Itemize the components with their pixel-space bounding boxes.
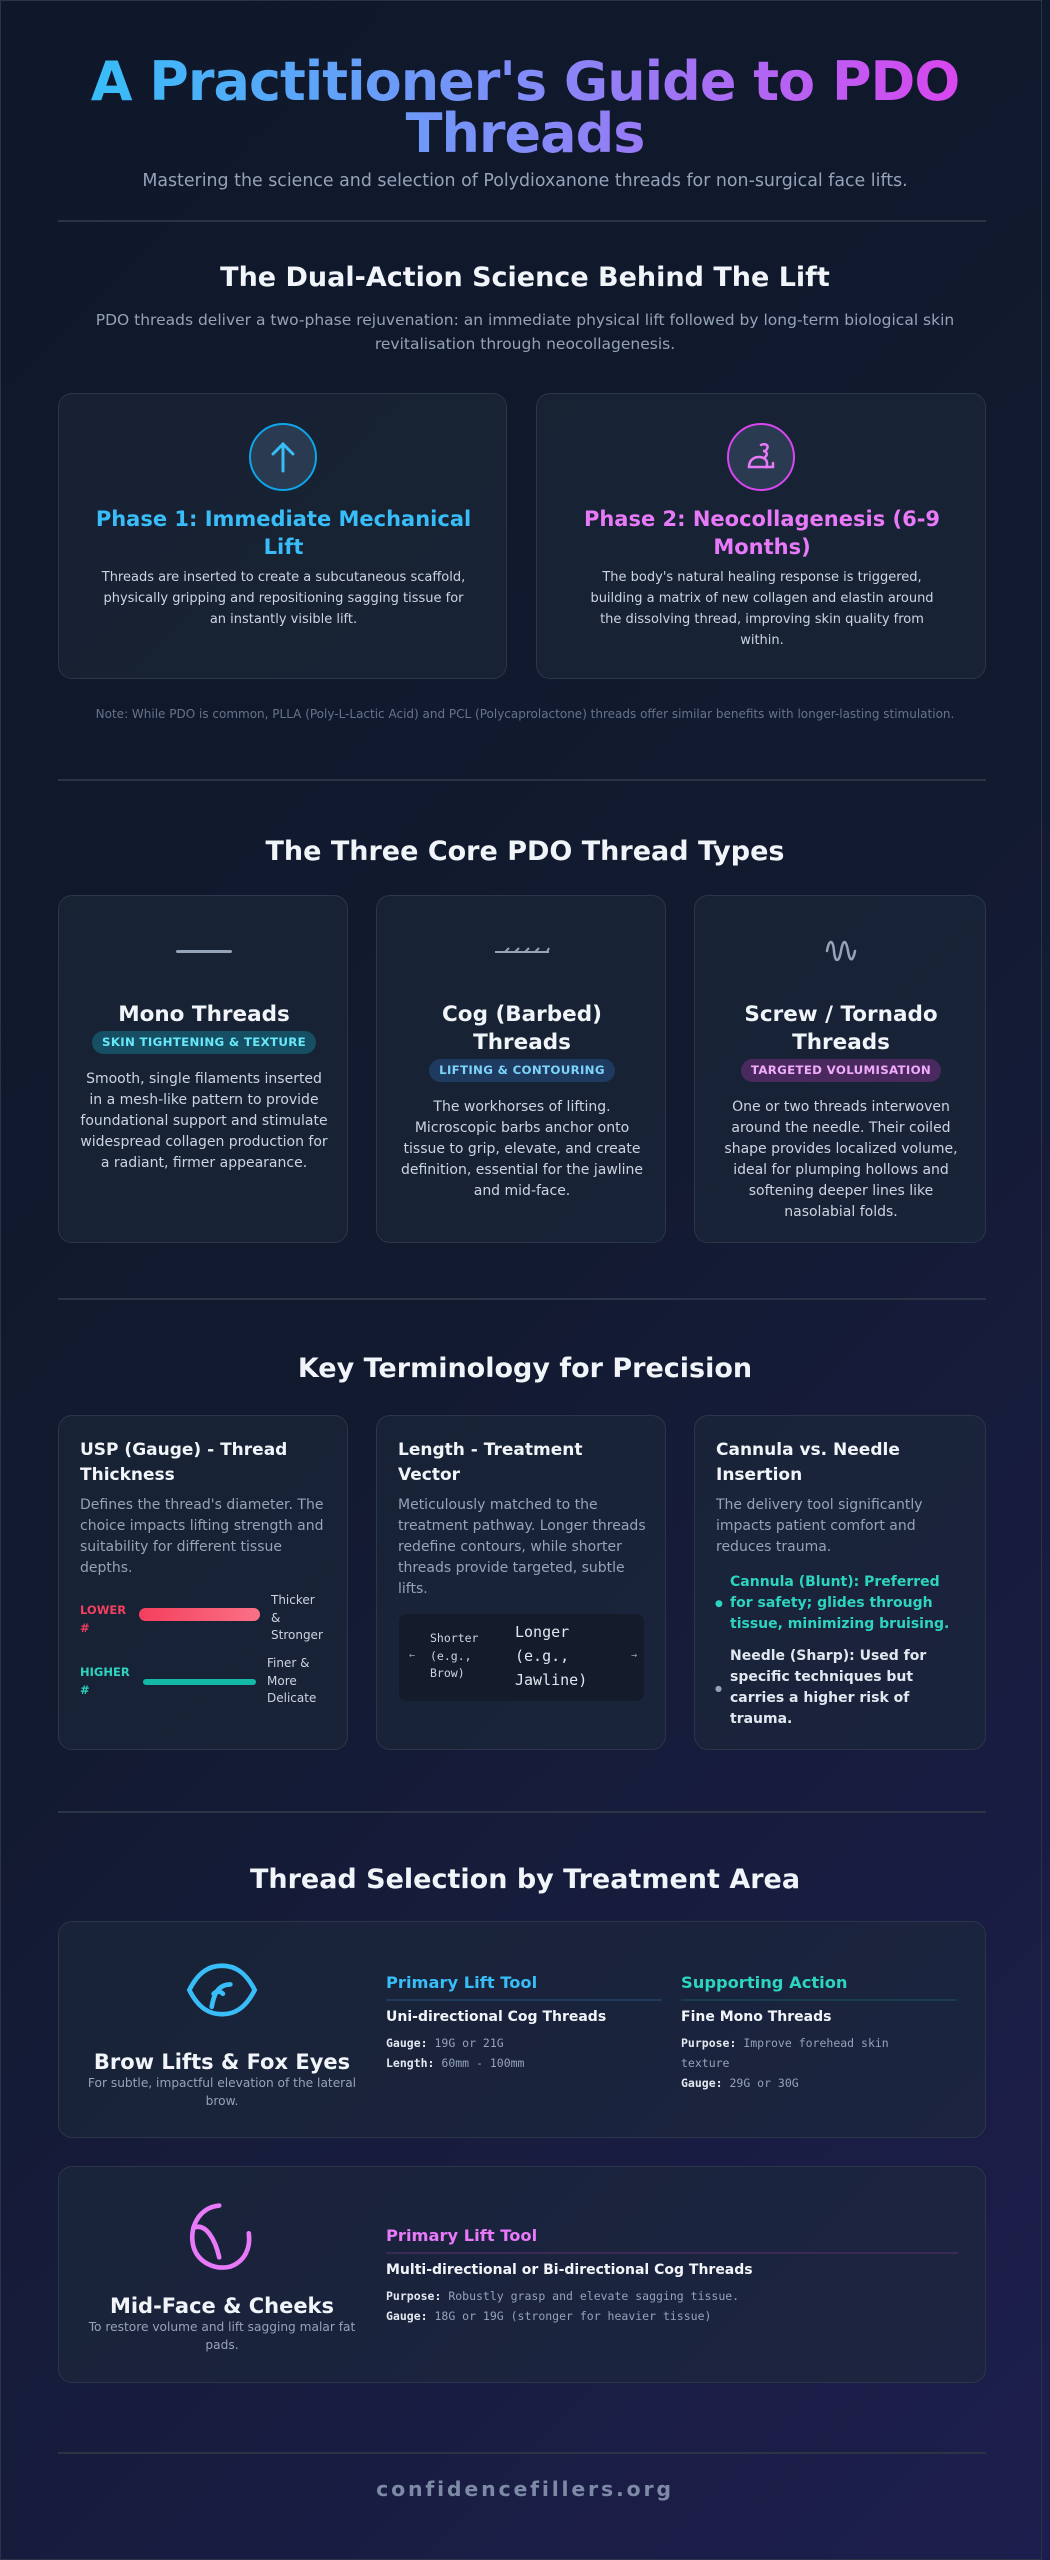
icon: cheek <box>190 2203 252 2270</box>
bullet needle: ● <box>715 1684 722 1693</box>
icon: up arrow <box>249 423 317 491</box>
cannula text: The delivery tool significantly <box>716 1497 923 1513</box>
screw text <box>724 1099 958 1220</box>
midface subtitle: pads. <box>205 2338 239 2352</box>
intro paragraph: PDO threads deliver a two-phase rejuvenation: an immediate physical lift followed by long-term biological skin <box>96 311 954 329</box>
cog text: tissue to grip, elevate, and create <box>404 1141 640 1157</box>
gauge text: suitability for different tissue <box>80 1539 282 1555</box>
panel: mid-face <box>58 2166 986 2383</box>
length scale box <box>399 1614 644 1701</box>
column: supporting action: texture <box>681 2056 729 2070</box>
panel: phase 2 <box>536 393 986 679</box>
intro paragraph <box>96 311 954 353</box>
length title: Vector <box>398 1464 460 1484</box>
screw text: One or two threads interwoven <box>732 1099 950 1115</box>
column: primary lift tool: Gauge: 19G or 21G <box>386 2036 504 2050</box>
phase 2 text: building a matrix of new collagen and elastin around <box>590 591 934 606</box>
lower bar row: # <box>80 1621 90 1635</box>
subtitle: Mastering the science and selection of Polydioxanone threads for non-surgical face lifts. <box>142 171 908 191</box>
column: primary lift tool: Gauge: 18G or 19G (stronger for heavier tissue) <box>386 2309 711 2323</box>
lower bar row <box>80 1593 323 1642</box>
cog text: and mid-face. <box>474 1183 570 1199</box>
higher bar row <box>80 1656 316 1705</box>
higher bar row: Finer & <box>267 1656 309 1670</box>
bullet needle <box>715 1648 926 1727</box>
length text: threads provide targeted, subtle <box>398 1560 625 1576</box>
lower bar row: LOWER <box>80 1603 126 1617</box>
title <box>40 56 1010 160</box>
gauge text <box>80 1497 324 1576</box>
screw title <box>744 1002 938 1054</box>
mono title: Mono Threads <box>118 1002 290 1027</box>
bullet cannula <box>715 1574 949 1632</box>
footer: confidencefillers.org <box>376 2477 674 2501</box>
brow subtitle: For subtle, impactful elevation of the lateral <box>88 2076 356 2090</box>
heading: dual action: The Dual-Action Science Behind The Lift <box>220 262 830 293</box>
lower bar row: & <box>271 1610 280 1624</box>
column: supporting action <box>681 1973 957 2090</box>
length scale box: (e.g., <box>430 1648 472 1662</box>
gauge title: USP (Gauge) - Thread <box>80 1440 287 1460</box>
cannula text <box>716 1497 923 1555</box>
gauge title: Thickness <box>80 1464 175 1484</box>
cog title: Cog (Barbed) <box>442 1002 602 1027</box>
length scale box: Jawline) <box>515 1671 587 1689</box>
length scale box: (e.g., <box>515 1647 569 1665</box>
phase 1 title: Phase 1: Immediate Mechanical <box>96 507 471 531</box>
cannula text: impacts patient comfort and <box>716 1518 916 1534</box>
phase 1 text <box>102 570 465 627</box>
column: primary lift tool <box>386 2226 958 2323</box>
bullet needle: specific techniques but <box>730 1669 913 1685</box>
lower bar row: Stronger <box>271 1628 323 1642</box>
badge: TARGETED VOLUMISATION <box>751 1063 931 1077</box>
badge: LIFTING & CONTOURING <box>439 1063 605 1077</box>
phase 2 title <box>584 507 940 559</box>
phase 1 text: an instantly visible lift. <box>210 612 357 627</box>
panel: brow lifts <box>58 1921 986 2138</box>
lower bar row: Thicker <box>271 1593 315 1607</box>
bullet needle: trauma. <box>730 1711 792 1727</box>
note: Note: While PDO is common, PLLA (Poly-L-Lactic Acid) and PCL (Polycaprolactone) threads offer similar benefits with longer-lasting stimulation. <box>96 707 954 721</box>
length text: Meticulously matched to the <box>398 1497 598 1513</box>
mono text: widespread collagen production for <box>80 1134 328 1150</box>
higher bar row: More <box>267 1674 297 1688</box>
cannula title: Insertion <box>716 1464 802 1484</box>
screw text: ideal for plumping hollows and <box>733 1162 949 1178</box>
length scale box: Brow) <box>430 1666 465 1680</box>
mono text: a radiant, firmer appearance. <box>101 1155 307 1171</box>
midface subtitle: To restore volume and lift sagging malar fat <box>89 2320 355 2334</box>
brow subtitle <box>88 2076 356 2108</box>
bullet needle: carries a higher risk of <box>730 1690 909 1706</box>
column: primary lift tool: Primary Lift Tool <box>386 2226 537 2245</box>
screw text: softening deeper lines like <box>749 1183 933 1199</box>
gauge text: depths. <box>80 1560 132 1576</box>
panel: screw threads <box>694 895 986 1243</box>
cog title: Threads <box>473 1030 571 1054</box>
heading: thread types: The Three Core PDO Thread Types <box>265 836 784 867</box>
length text: redefine contours, while shorter <box>398 1539 622 1555</box>
title: Threads <box>406 102 644 165</box>
mono text: in a mesh-like pattern to provide <box>89 1092 319 1108</box>
phase 2 text <box>590 570 934 648</box>
screw title: Screw / Tornado <box>744 1002 938 1027</box>
badge: SKIN TIGHTENING & TEXTURE <box>102 1035 306 1049</box>
panel: mono threads <box>58 895 348 1243</box>
panel: cannula vs needle <box>694 1415 986 1750</box>
brow subtitle: brow. <box>206 2094 238 2108</box>
cog title <box>442 1002 602 1054</box>
length text: treatment pathway. Longer threads <box>398 1518 646 1534</box>
phase 1 text: physically gripping and repositioning sagging tissue for <box>103 591 464 606</box>
column: primary lift tool: Purpose: Robustly grasp and elevate sagging tissue. <box>386 2289 739 2303</box>
title: A Practitioner's Guide to PDO <box>91 50 959 113</box>
length text: lifts. <box>398 1581 428 1597</box>
mono text <box>80 1071 328 1171</box>
bullet cannula: tissue, minimizing bruising. <box>730 1616 949 1632</box>
panel: gauge <box>58 1415 348 1750</box>
cog text: The workhorses of lifting. <box>433 1099 611 1115</box>
midface subtitle <box>88 2320 355 2352</box>
gauge text: Defines the thread's diameter. The <box>80 1497 323 1513</box>
column: primary lift tool: Multi-directional or Bi-directional Cog Threads <box>386 2262 753 2278</box>
bullet needle: Needle (Sharp): Used for <box>730 1648 926 1664</box>
higher bar row: # <box>80 1683 90 1697</box>
length scale box: → <box>631 1650 637 1661</box>
cog text: definition, essential for the jawline <box>401 1162 643 1178</box>
phase 2 text: within. <box>740 633 784 648</box>
phase 2 title: Months) <box>713 535 811 559</box>
bullet cannula: ● <box>715 1599 723 1609</box>
length scale box: ← <box>409 1650 415 1661</box>
column: primary lift tool: Uni-directional Cog Threads <box>386 2009 606 2025</box>
icon: barbed line <box>495 947 550 953</box>
cannula title: Cannula vs. Needle <box>716 1440 900 1460</box>
mono text: Smooth, single filaments inserted <box>86 1071 322 1087</box>
column: primary lift tool: Primary Lift Tool <box>386 1973 537 1992</box>
length title: Length - Treatment <box>398 1440 582 1460</box>
mono text: foundational support and stimulate <box>80 1113 328 1129</box>
cog text: Microscopic barbs anchor onto <box>415 1120 629 1136</box>
column: primary lift tool <box>386 1973 662 2070</box>
length text <box>398 1497 646 1597</box>
panel: phase 1 <box>58 393 507 679</box>
heading: terminology: Key Terminology for Precision <box>298 1353 752 1384</box>
bullet cannula: Cannula (Blunt): Preferred <box>730 1574 940 1590</box>
gauge text: choice impacts lifting strength and <box>80 1518 324 1534</box>
midface title: Mid-Face & Cheeks <box>110 2294 334 2318</box>
bullet cannula: for safety; glides through <box>730 1595 933 1611</box>
column: supporting action: Supporting Action <box>681 1973 848 1992</box>
length scale box: Longer <box>515 1623 569 1641</box>
higher bar row: HIGHER <box>80 1665 130 1679</box>
phase 1 text: Threads are inserted to create a subcutaneous scaffold, <box>102 570 465 585</box>
length title <box>398 1440 582 1484</box>
cannula title <box>716 1440 900 1484</box>
heading: treatment area: Thread Selection by Treatment Area <box>250 1864 800 1895</box>
icon: collagen <box>727 423 795 491</box>
column: primary lift tool: Length: 60mm - 100mm <box>386 2056 524 2070</box>
panel: cog threads <box>376 895 666 1243</box>
higher bar row: Delicate <box>267 1691 316 1705</box>
brow title: Brow Lifts & Fox Eyes <box>94 2050 350 2074</box>
column: supporting action: Purpose: Improve forehead skin <box>681 2036 889 2050</box>
phase 2 title: Phase 2: Neocollagenesis (6-9 <box>584 507 940 531</box>
phase 2 text: the dissolving thread, improving skin quality from <box>600 612 924 627</box>
column: supporting action: Fine Mono Threads <box>681 2009 831 2025</box>
screw text: around the needle. Their coiled <box>731 1120 951 1136</box>
screw title: Threads <box>792 1030 890 1054</box>
phase 2 text: The body's natural healing response is triggered, <box>602 570 922 585</box>
icon: mono line <box>176 950 232 953</box>
icon: coil <box>826 940 856 961</box>
cog text <box>401 1099 643 1199</box>
phase 1 title <box>96 507 471 559</box>
screw text: shape provides localized volume, <box>724 1141 958 1157</box>
screw text: nasolabial folds. <box>784 1204 898 1220</box>
phase 1 title: Lift <box>264 535 303 559</box>
length scale box: Shorter <box>430 1631 478 1645</box>
column: supporting action: Gauge: 29G or 30G <box>681 2076 799 2090</box>
panel: length <box>376 1415 666 1750</box>
cannula text: reduces trauma. <box>716 1539 831 1555</box>
intro paragraph: revitalisation through neocollagenesis. <box>375 335 675 353</box>
icon: eye <box>186 1963 258 2017</box>
gauge title <box>80 1440 287 1484</box>
